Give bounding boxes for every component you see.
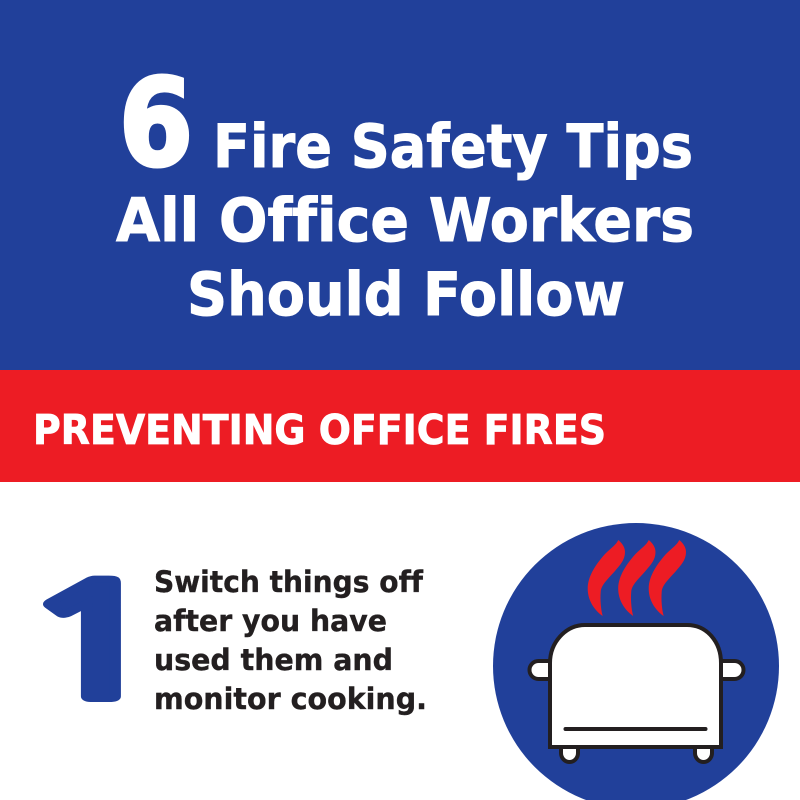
icon: steam flames — [588, 540, 686, 616]
panel: blue header background — [0, 0, 800, 370]
section heading: PREVENTING OFFICE FIRES — [33, 406, 606, 454]
title: 6 — [119, 55, 193, 194]
icon background circle — [493, 523, 779, 800]
toaster feet — [561, 745, 712, 762]
toaster handles — [530, 661, 744, 679]
title: Fire Safety Tips — [213, 112, 693, 182]
icon: toaster in blue circle — [493, 523, 779, 800]
tip number 1: 1 — [15, 567, 175, 722]
tip text — [154, 565, 427, 716]
tip text: Switch things off — [154, 565, 423, 599]
toaster body — [550, 625, 721, 747]
tip text: used them and — [154, 643, 393, 677]
title: Should Follow — [187, 260, 625, 330]
title: All Office Workers — [116, 186, 694, 256]
panel: red section banner — [0, 370, 800, 482]
toaster slot — [566, 727, 706, 731]
tip text: after you have — [154, 604, 387, 638]
title — [116, 55, 694, 330]
tip text: monitor cooking. — [154, 682, 427, 716]
